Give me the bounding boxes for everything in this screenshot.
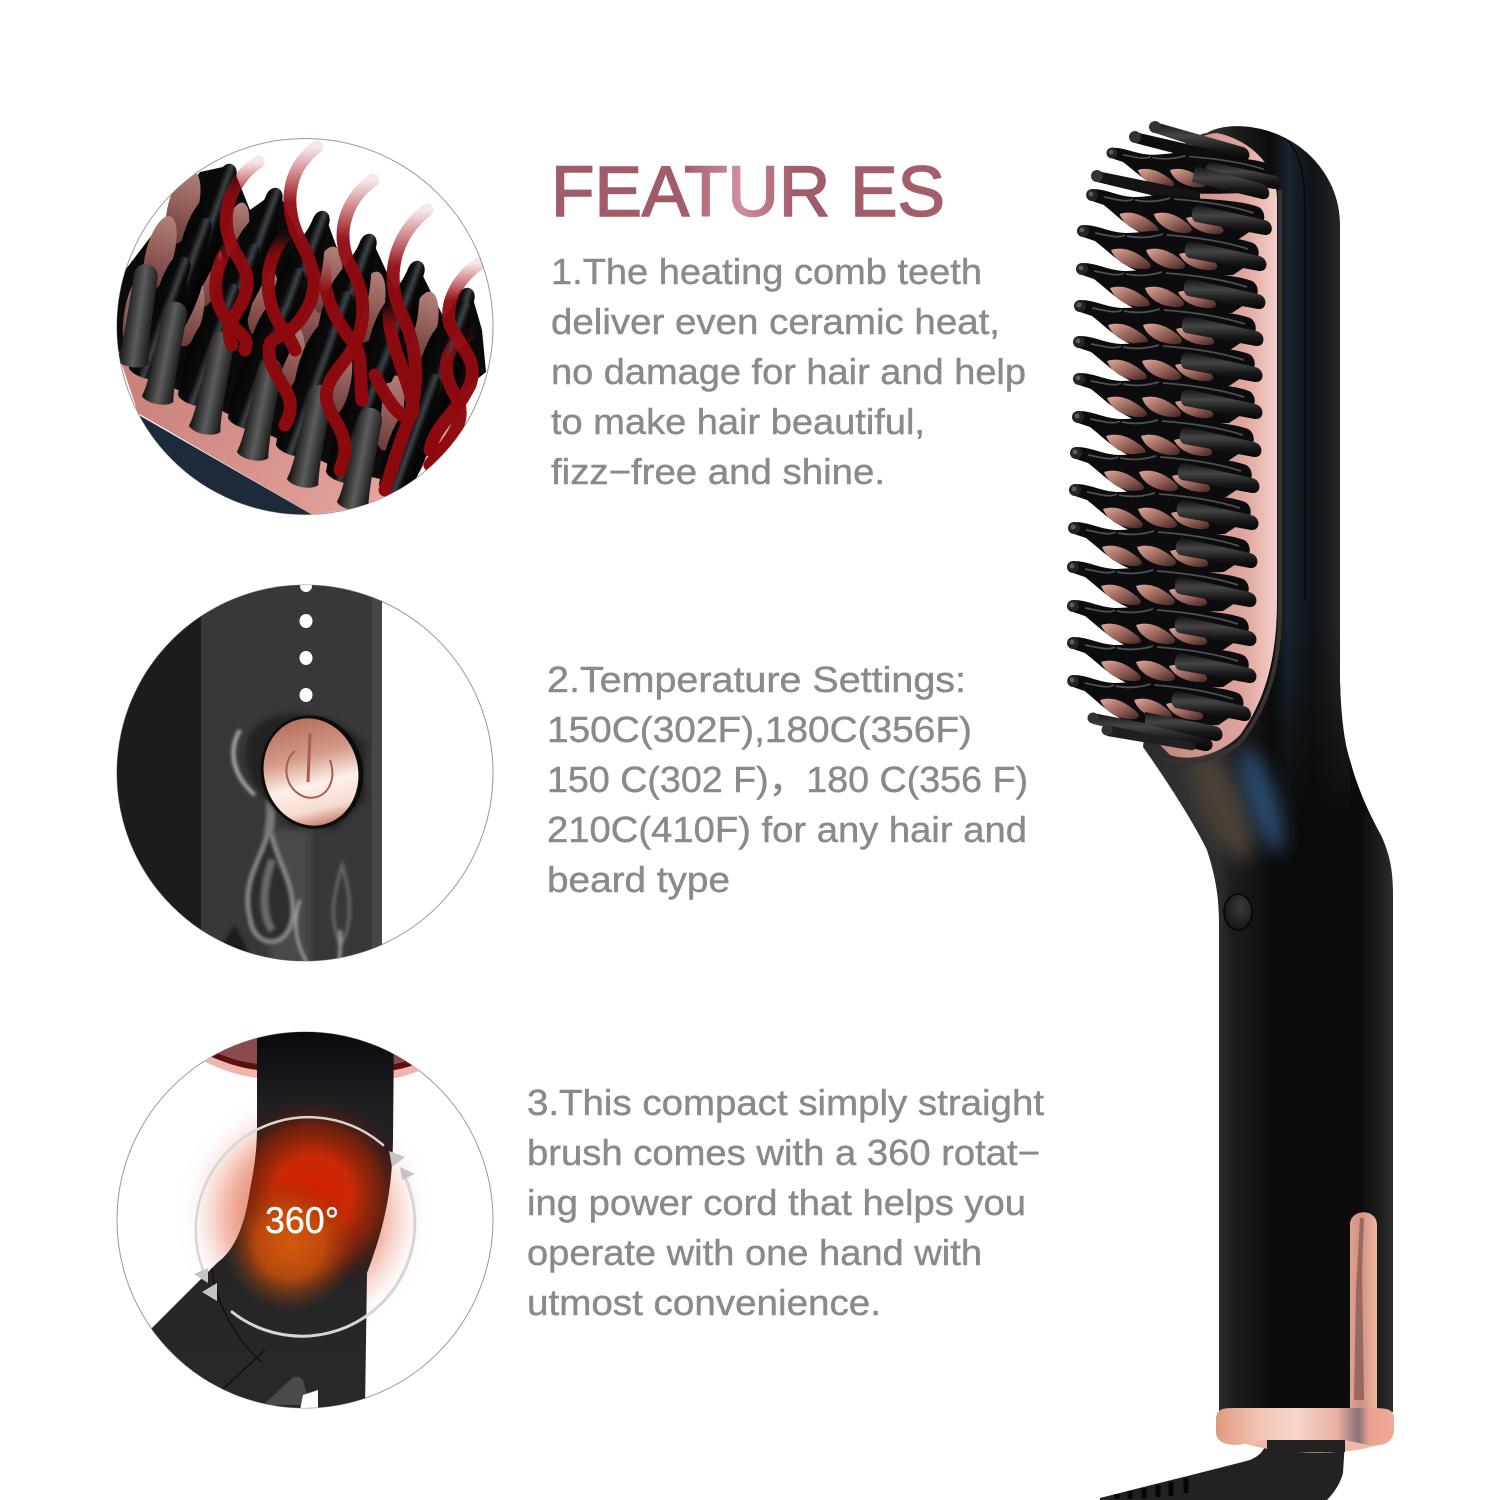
text block: feature 3: brush comes with a 360 rotat− bbox=[527, 1132, 1040, 1173]
icon: rotation ring arrows bbox=[194, 1117, 415, 1336]
brush body bbox=[1143, 120, 1393, 1412]
text: 360 degree label: 360° bbox=[265, 1200, 339, 1241]
text block: feature 3: 3.This compact simply straight bbox=[527, 1082, 1044, 1123]
rose gold cord slot bbox=[1345, 1212, 1377, 1411]
text block: feature 3 bbox=[527, 1082, 1044, 1323]
text block: feature 2: 2.Temperature Settings: bbox=[547, 659, 966, 700]
icon: power button bbox=[260, 716, 364, 829]
text block: feature 3: utmost convenience. bbox=[527, 1282, 881, 1323]
comb bristle rows bbox=[1067, 121, 1281, 751]
text block: feature 1 bbox=[551, 251, 1026, 492]
icon: red heat flames bbox=[216, 147, 480, 490]
rose gold collar ring bbox=[1216, 1408, 1394, 1453]
small round switch bbox=[1224, 894, 1252, 930]
text block: feature 3: ing power cord that helps you bbox=[527, 1182, 1026, 1223]
text block: feature 2 bbox=[547, 659, 1028, 900]
text block: feature 2: 210C(410F) for any hair and bbox=[547, 809, 1027, 850]
text block: feature 1: fizz−free and shine. bbox=[551, 451, 885, 492]
product: hair straightening brush bbox=[1067, 120, 1394, 1500]
text block: feature 1: no damage for hair and help bbox=[551, 351, 1026, 392]
text block: feature 1: to make hair beautiful, bbox=[551, 401, 925, 442]
pink heating plate bbox=[1145, 133, 1277, 758]
text block: feature 3: operate with one hand with bbox=[527, 1232, 982, 1273]
panel: comb teeth heat detail circle bbox=[110, 138, 493, 530]
text block: feature 2: 150C(302F),180C(356F) bbox=[547, 709, 972, 750]
text block: feature 2: beard type bbox=[547, 859, 730, 900]
text block: feature 2: 150 C(302 F)，180 C(356 F) bbox=[547, 759, 1028, 800]
text block: feature 1: 1.The heating comb teeth bbox=[551, 251, 982, 292]
title: FEATURES heading: FEATUR ES bbox=[551, 153, 945, 232]
icon: indicator dots bbox=[300, 580, 312, 702]
text block: feature 1: deliver even ceramic heat, bbox=[551, 301, 1000, 342]
icon: smoke flames bbox=[215, 800, 349, 965]
panel: power button detail circle bbox=[110, 580, 493, 970]
power cord bbox=[1100, 1440, 1345, 1500]
panel: 360 rotating cord detail circle bbox=[117, 1020, 493, 1410]
